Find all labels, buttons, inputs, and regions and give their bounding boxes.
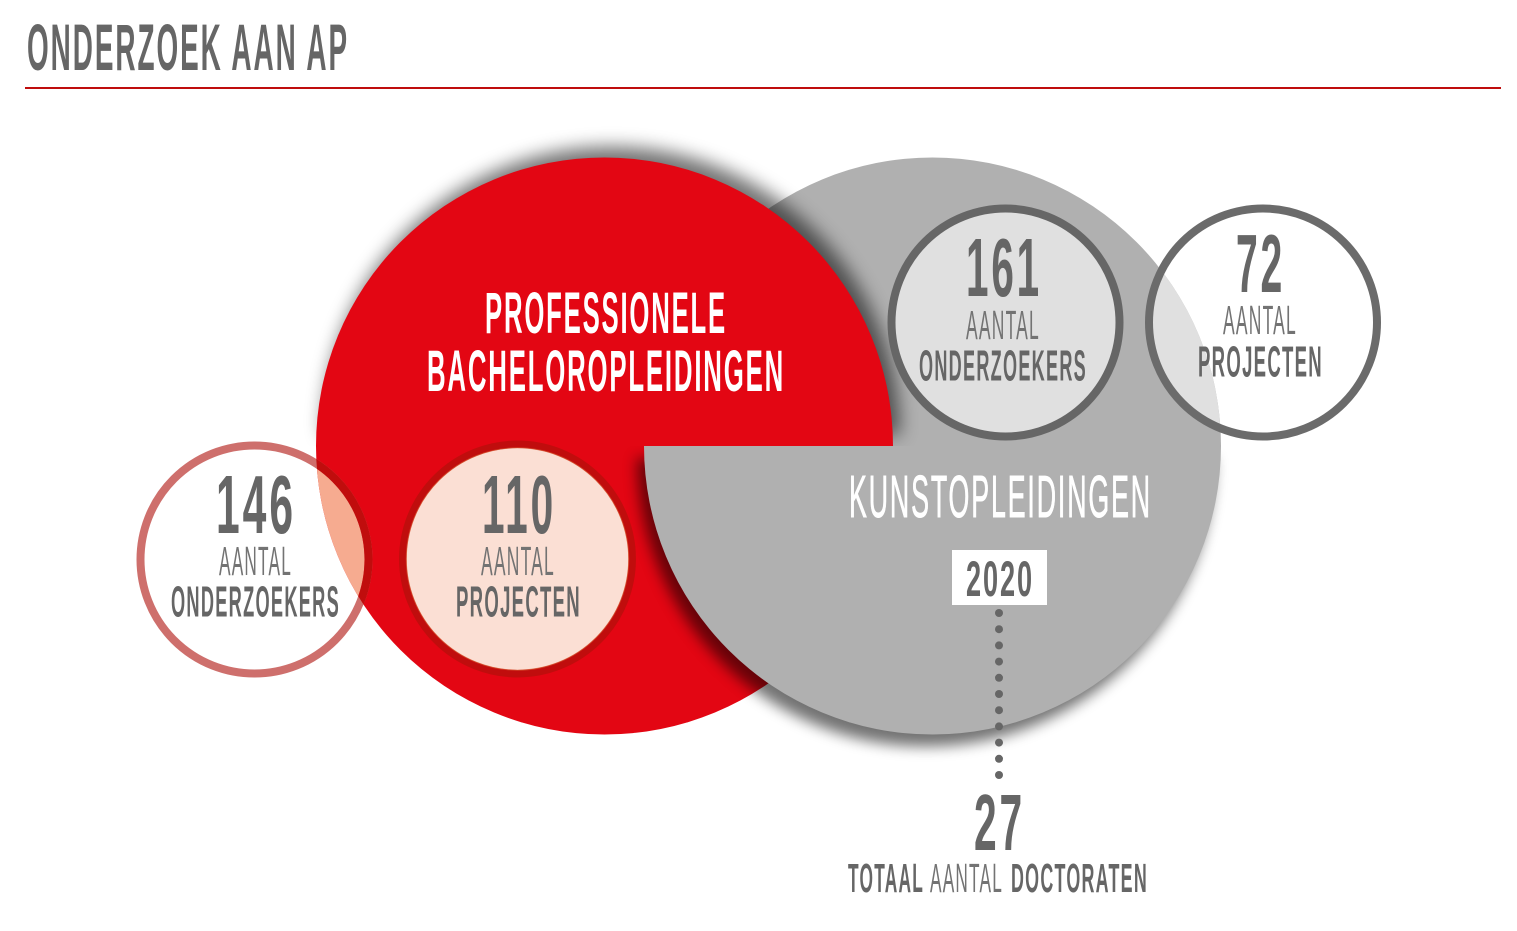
stat: 161 onderzoekers: AANTAL (966, 302, 1040, 348)
dotted connector (995, 609, 1003, 779)
year badge: 2020 (966, 551, 1034, 607)
stat: 146 onderzoekers (140, 446, 368, 674)
stat: 27 doctoraten (848, 778, 1148, 901)
stat: 146 onderzoekers: AANTAL (219, 538, 292, 584)
stat: 27 doctoraten: 27 (974, 778, 1025, 867)
stat: 161 onderzoekers: 161 (966, 221, 1042, 314)
text: KUNSTOPLEIDINGEN (849, 464, 1152, 530)
stat: 72 projecten: PROJECTEN (1198, 338, 1323, 386)
stat: 110 projecten: AANTAL (481, 538, 555, 584)
red circle (316, 158, 893, 734)
stat: 110 projecten: 110 (482, 458, 556, 551)
stat: 72 projecten: 72 (1236, 217, 1285, 310)
text: ONDERZOEK AAN AP (27, 10, 349, 84)
text: ONDERZOEKERS (919, 342, 1087, 390)
grey circle: upper half (768, 158, 1221, 446)
venn diagram circles (316, 146, 1221, 746)
text: BACHELOROPLEIDINGEN (427, 339, 785, 404)
year badge (952, 550, 1047, 607)
grey circle: lower half (644, 446, 1221, 734)
shadow of red circle (323, 146, 900, 435)
text: DOCTORATEN (1011, 855, 1148, 901)
inner ring edge (406, 448, 629, 670)
shadow of grey circle (637, 458, 1214, 746)
stat: 161 onderzoekers (892, 208, 1120, 436)
stat: 27 doctoraten: AANTAL (930, 855, 1003, 901)
panel: professionele bacheloropleidingen label: PROFESSIONELE (485, 281, 727, 346)
title rule (25, 87, 1501, 89)
panel: professionele bacheloropleidingen label (427, 281, 785, 404)
stat: 27 doctoraten: TOTAAL (848, 855, 924, 901)
stat: 110 projecten: PROJECTEN (456, 578, 581, 626)
text: ONDERZOEKERS (171, 578, 340, 626)
stat: 146 onderzoekers: 146 (216, 458, 296, 551)
stat: 72 projecten (1149, 208, 1377, 436)
stat: 110 projecten (403, 444, 632, 674)
stat: 72 projecten: AANTAL (1223, 297, 1297, 343)
